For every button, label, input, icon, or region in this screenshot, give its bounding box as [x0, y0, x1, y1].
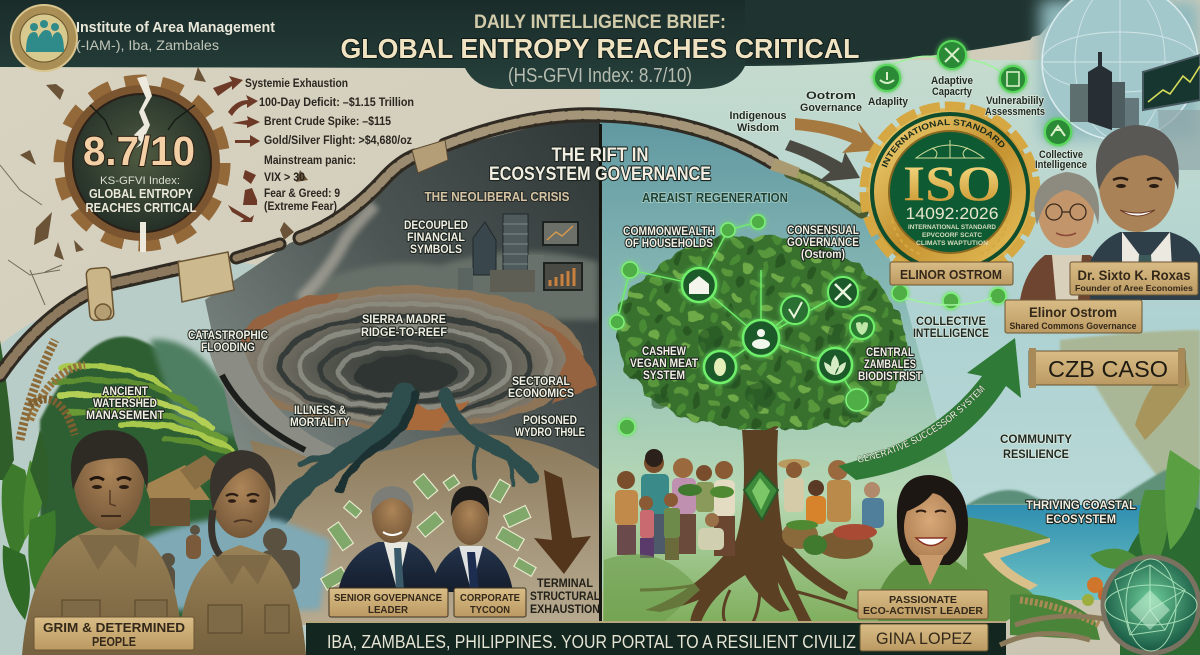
bottom banner [306, 621, 1006, 655]
ISO 14092 badge: INTERNATIONAL STANDARD [908, 224, 997, 231]
city on crisis side [458, 214, 582, 292]
right panel labels: ZAMBALES [864, 359, 916, 371]
terminal structural exhaustion label: STRUCTURAL [530, 589, 600, 603]
network arcs near Collective Intelligence [870, 56, 1003, 305]
icon: biodistrict lotus [818, 348, 852, 382]
right panel labels: (Ostrom) [801, 249, 845, 261]
workers right of tree [778, 459, 884, 559]
grim woman [178, 450, 306, 655]
icon: adaptability [874, 65, 900, 91]
falling money [321, 474, 536, 590]
senior governance leader [338, 486, 440, 592]
left panel labels: SYMBOLS [410, 244, 462, 256]
monitor: bar chart [544, 263, 582, 290]
right panel labels: VEGAN MEAT [630, 358, 698, 370]
ISO 14092 badge [860, 102, 1040, 262]
plaque: senior governance leader: LEADER [368, 604, 408, 616]
title block: DAILY INTELLIGENCE BRIEF: [474, 12, 726, 33]
left panel labels: WATERSHED [93, 398, 157, 410]
outcome labels [730, 75, 1136, 526]
icon: tools [828, 277, 858, 307]
rice stalks left [20, 340, 85, 440]
header right fill [745, 0, 1070, 64]
left panel labels: SECTORAL [512, 376, 570, 388]
outcome labels: THRIVING COASTAL [1026, 498, 1136, 512]
flood band with crack [205, 330, 345, 462]
stats arrows [213, 76, 260, 222]
stats list: (Extreme Fear) [264, 199, 337, 213]
map land [1060, 330, 1200, 500]
left panel labels: RIDGE-TO-REEF [361, 327, 447, 339]
icon: adaptive capacity [938, 41, 966, 69]
stats list: Brent Crude Spike: –$115 [264, 114, 391, 128]
plaque: grim and determined people: PEOPLE [92, 634, 136, 649]
right panel labels [623, 225, 922, 383]
stats list: VIX > 30 [264, 170, 305, 184]
icon: collective intelligence [1045, 119, 1071, 145]
Sixto Roxas portrait [1090, 125, 1200, 300]
right panel: regeneration backdrop [600, 112, 985, 625]
icon: community hub [743, 320, 779, 356]
plaque: senior governance leader: SENIOR GOVEPNANCE [334, 592, 442, 604]
generative succession arrow [838, 338, 1021, 480]
rift heading: ECOSYSTEM GOVERNANCE [489, 164, 711, 185]
terminal exhaustion arrow [534, 470, 591, 574]
index gear dial: 8.7/10 [83, 128, 195, 174]
rope arch [0, 115, 862, 375]
plaque: senior governance leader [329, 588, 448, 617]
outcome labels: Intelligence [1035, 159, 1087, 171]
plaque: Elinor Ostrom badge label [890, 262, 1013, 285]
right panel labels: GOVERNANCE [787, 237, 859, 249]
icon: cashew [704, 351, 736, 383]
monitor: line chart [543, 222, 578, 245]
stats list: Fear & Greed: 9 [264, 186, 340, 200]
emerald trunk emblem [744, 470, 778, 520]
rope left segment [0, 268, 180, 375]
outcome labels: COMMUNITY [1000, 432, 1072, 446]
plaque: Elinor Ostrom badge label: ELINOR OSTROM [900, 267, 1002, 282]
outcome labels: Ootrom [806, 90, 856, 102]
right panel labels: BIODISTRIST [858, 371, 922, 383]
tree canopy [617, 222, 908, 430]
right panel labels: OF HOUSEHOLDS [625, 238, 713, 250]
hut [145, 455, 222, 526]
logo seal [11, 5, 77, 71]
outcome labels: Assessments [985, 106, 1045, 118]
outcome labels: Collective [1039, 149, 1083, 161]
plaque: corporate tycoon: TYCOON [470, 604, 510, 616]
plaque: Dr. Sixto K. Roxas [1070, 262, 1198, 295]
left panel labels: CATASTROPHIC [188, 330, 268, 342]
title block: (HS-GFVI Index: 8.7/10) [508, 65, 692, 87]
central divider [599, 124, 602, 624]
village river [140, 518, 330, 610]
rope and wheat bottom right [1000, 616, 1110, 645]
poisoned river [274, 392, 532, 540]
left panel labels: POISONED [523, 415, 577, 427]
globe mesh [916, 140, 984, 158]
icon: household [682, 268, 716, 302]
ISO 14092 badge: ISO [903, 155, 1001, 211]
ISO 14092 badge: CLIMATS WAPTUTION [916, 240, 989, 247]
villagers [150, 525, 300, 595]
right panel labels: CONSENSUAL [787, 225, 859, 237]
smoke plume [300, 205, 375, 300]
outcome labels: Governance [800, 102, 862, 114]
Gina Lopez portrait [878, 475, 985, 625]
banana leaves left [0, 340, 56, 620]
small green nodes [610, 215, 1006, 435]
plaque: passionate eco-activist leader [858, 590, 988, 619]
right panel labels: COMMONWEALTH [623, 226, 715, 238]
plaque: Elinor Ostrom shared commons: Elinor Ostrom [1029, 304, 1117, 320]
distant hills [300, 252, 598, 320]
header band [0, 0, 1060, 89]
left panel labels: SIERRA MADRE [362, 314, 446, 326]
Elinor Ostrom portrait [1020, 172, 1125, 330]
outcome labels: COLLECTIVE [916, 314, 986, 328]
plaque: Dr. Sixto K. Roxas: Dr. Sixto K. Roxas [1078, 268, 1190, 283]
index gear dial: KS-GFVI Index: [100, 175, 180, 187]
outcome labels: INTELLIGENCE [913, 326, 989, 340]
arrow: Indigenous Wisdom [785, 140, 860, 182]
plaque: corporate tycoon: CORPORATE [460, 592, 520, 604]
terminal structural exhaustion label: EXHAUSTION [530, 602, 600, 616]
corporate tycoon [430, 486, 513, 592]
title block: GLOBAL ENTROPY REACHES CRITICAL [340, 33, 860, 64]
outcome labels: RESILIENCE [1003, 447, 1069, 461]
right panel labels: CENTRAL [866, 347, 914, 359]
icon: consensus check [781, 296, 809, 324]
open pit mine [232, 286, 596, 430]
plaque: grim and determined people: GRIM & DETERMINED [43, 620, 185, 635]
grass patch [604, 554, 700, 625]
tree network icons [610, 215, 1006, 435]
right panel labels: CASHEW [642, 346, 686, 358]
generative succession arrow: GENERATIVE SUCCESSOR SYSTEM [857, 384, 986, 463]
plaque: Elinor Ostrom shared commons [1005, 300, 1142, 333]
left panel labels: FLOODING [201, 342, 255, 354]
rice terraces [56, 366, 240, 460]
top green icons [874, 41, 1071, 145]
left panel labels: ANCIENT [102, 386, 148, 398]
left panel: neoliberal crisis backdrop [205, 112, 600, 625]
plaque: passionate eco-activist leader: ECO-ACTIVIST LEADER [863, 605, 983, 617]
outcome labels: Capacrty [932, 86, 973, 98]
left landscape [0, 262, 340, 655]
left panel labels: MORTALITY [290, 417, 350, 429]
outcome labels: Wisdom [737, 122, 779, 134]
paper cracks [0, 165, 62, 305]
index gear dial: GLOBAL ENTROPY [89, 186, 193, 201]
outcome labels: Adaptive [931, 75, 973, 87]
arrow: Ostrom Governance [795, 118, 880, 153]
rift heading [489, 145, 711, 185]
stats list: Systemie Exhaustion [245, 78, 348, 90]
family group left of tree [615, 449, 735, 560]
stats list: Gold/Silver Flight: >$4,680/oz [264, 133, 412, 147]
top-right globe with city [1040, 0, 1200, 170]
ISO 14092 badge: EPVCOORF SCATC [922, 232, 983, 239]
outcome labels: Adaplity [868, 96, 909, 108]
grim man [22, 430, 183, 655]
index gear dial: REACHES CRITICAL [86, 200, 197, 215]
institute name: Institute of Area Management [76, 20, 275, 36]
terminal structural exhaustion label: TERMINAL [537, 576, 593, 590]
title block [340, 12, 860, 87]
stats list: 100-Day Deficit: –$1.15 Trillion [259, 95, 414, 109]
rift heading: THE RIFT IN [552, 145, 648, 166]
parchment scrolls on rope [86, 140, 800, 321]
gear shards [20, 67, 308, 260]
institute name: (-IAM-), Iba, Zambales [76, 37, 219, 53]
stats list: Mainstream panic: [264, 153, 356, 167]
rope right segment [790, 172, 862, 212]
right foliage [1010, 355, 1200, 655]
plaque: Gina Lopez: GINA LOPEZ [876, 629, 972, 648]
lower ground [250, 434, 600, 625]
left panel labels [86, 220, 585, 439]
left panel labels: DECOUPLED [404, 220, 468, 232]
crack through gear [134, 76, 152, 252]
ISO 14092 badge: INTERNATIONAL STANDARD [882, 119, 1004, 168]
ISO 14092 badge: 14092:2026 [906, 204, 998, 223]
plaque: grim and determined people [34, 617, 194, 650]
rope middle segment [236, 115, 772, 258]
outcome labels: ECOSYSTEM [1046, 512, 1116, 526]
plaque: Elinor Ostrom shared commons: Shared Commons Governance [1010, 321, 1136, 331]
right sky [600, 60, 1200, 590]
terminal structural exhaustion label [530, 576, 600, 616]
left panel labels: WYDRO TH9LE [515, 427, 585, 439]
plaque: CZB CASO scroll [1029, 348, 1185, 388]
plaque: CZB CASO scroll: CZB CASO [1048, 356, 1168, 382]
icon: leaf heart [850, 315, 874, 339]
plaque: Gina Lopez [860, 624, 988, 651]
influence arrows into ISO badge [785, 118, 880, 182]
laurel sprays [892, 220, 1008, 254]
stats list [245, 78, 414, 213]
plaque: Dr. Sixto K. Roxas: Founder of Aree Economies [1075, 283, 1193, 293]
index gear dial [62, 76, 222, 252]
panel heading: neoliberal crisis: THE NEOLIBERAL CRISIS [424, 189, 570, 204]
panel heading: areaist regeneration: AREAIST REGENERATION [642, 190, 788, 205]
institute name [76, 20, 275, 53]
icon: vulnerability assessments [1000, 66, 1026, 92]
plaque: corporate tycoon [454, 588, 526, 617]
right panel labels: SYSTEM [643, 370, 685, 382]
plaque: passionate eco-activist leader: PASSIONATE [889, 594, 957, 606]
outcome labels: Indigenous [730, 110, 786, 122]
network orb [1103, 557, 1199, 653]
left panel labels: FINANCIAL [407, 232, 465, 244]
left panel labels: ILLNESS & [294, 405, 346, 417]
left panel labels: ECONOMICS [508, 388, 574, 400]
outcome labels: Vulnerabilily [986, 95, 1045, 107]
left panel labels: MANASEMENT [86, 410, 164, 422]
bottom banner: IBA, ZAMBALES, PHILIPPINES. YOUR PORTAL TO A RESILIENT CIVILIZ [327, 632, 856, 652]
tree roots and trunk [640, 338, 860, 625]
stock screen [1143, 55, 1200, 110]
coastal scene [960, 470, 1200, 625]
